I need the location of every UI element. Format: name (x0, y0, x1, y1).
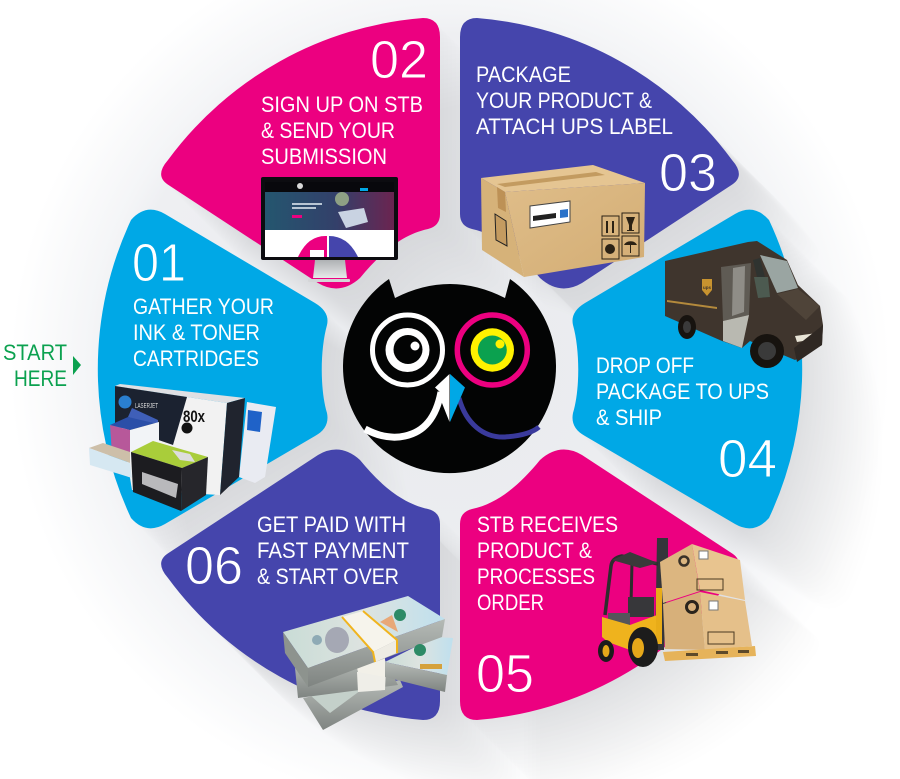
step 02 text: SIGN UP ON STB (261, 92, 423, 117)
step 05 text: PROCESSES (477, 564, 595, 589)
number 04: 04 (718, 429, 777, 489)
step 03 text: ATTACH UPS LABEL (476, 114, 673, 139)
step 06 text (257, 512, 409, 589)
segment shape 03 (460, 18, 739, 288)
owl logo (343, 279, 556, 473)
number 01: 01 (132, 233, 186, 293)
segment shape 04 (572, 210, 802, 528)
beak blue half (450, 374, 465, 422)
icon: desktop monitor showing website (261, 177, 398, 282)
step 01 text: GATHER YOUR (133, 294, 274, 319)
step 01 text: INK & TONER (133, 320, 260, 345)
number 06: 06 (185, 536, 243, 596)
segment shape 02 (161, 18, 440, 288)
icon: stacks of dollar bills (283, 596, 453, 730)
step 05 text: STB RECEIVES (477, 512, 618, 537)
step 01 text: CARTRIDGES (133, 346, 259, 371)
step 02 text (261, 92, 423, 169)
step 04 text: & SHIP (596, 405, 662, 430)
segment shape 05 (460, 450, 739, 720)
arrow: start marker (73, 356, 81, 375)
step 05 text: PRODUCT & (477, 538, 592, 563)
step 05 text (477, 512, 618, 615)
step 02 text: SUBMISSION (261, 144, 387, 169)
step 06 text: GET PAID WITH (257, 512, 406, 537)
step 04 text (596, 353, 769, 430)
icon: ink and toner cartridge boxes (89, 384, 276, 511)
panel: step 01 (89, 210, 328, 528)
purple curved arrow tail (459, 398, 539, 437)
left eye (372, 315, 442, 385)
number 02: 02 (370, 30, 428, 90)
step 01 text (133, 294, 274, 371)
segment shape 06 (161, 450, 440, 720)
panel: step 06 (161, 450, 453, 730)
icon: forklift with boxes on pallet (598, 538, 756, 667)
number 03: 03 (659, 143, 717, 203)
step 04 text: PACKAGE TO UPS (596, 379, 769, 404)
step 03 text: PACKAGE (476, 62, 571, 87)
icon: ink and toner cartridge boxes: 80x (183, 407, 205, 426)
segment shape 01 (98, 210, 328, 528)
icon: UPS delivery truck (665, 241, 823, 368)
icon: ink and toner cartridge boxes: LASERJET (135, 403, 158, 410)
callout: start here: HERE (14, 366, 67, 391)
step 02 text: & SEND YOUR (261, 118, 395, 143)
right eye (457, 315, 527, 385)
number 05: 05 (476, 644, 534, 704)
panel: step 03 (460, 18, 739, 288)
beak white half (435, 374, 450, 422)
callout: start here (3, 340, 81, 391)
callout: start here: START (3, 340, 67, 365)
step 06 text: & START OVER (257, 564, 399, 589)
panel: step 02 (161, 18, 440, 288)
step 03 text (476, 62, 673, 139)
step 03 text: YOUR PRODUCT & (476, 88, 652, 113)
panel: step 05 (460, 450, 756, 720)
owl head (343, 279, 556, 473)
icon: cardboard box (481, 165, 645, 277)
step 06 text: FAST PAYMENT (257, 538, 409, 563)
white curved arrow tail (365, 392, 441, 437)
panel: step 04 (572, 210, 823, 528)
step 05 text: ORDER (477, 590, 544, 615)
step 04 text: DROP OFF (596, 353, 694, 378)
icon: UPS delivery truck: ups (703, 285, 711, 290)
